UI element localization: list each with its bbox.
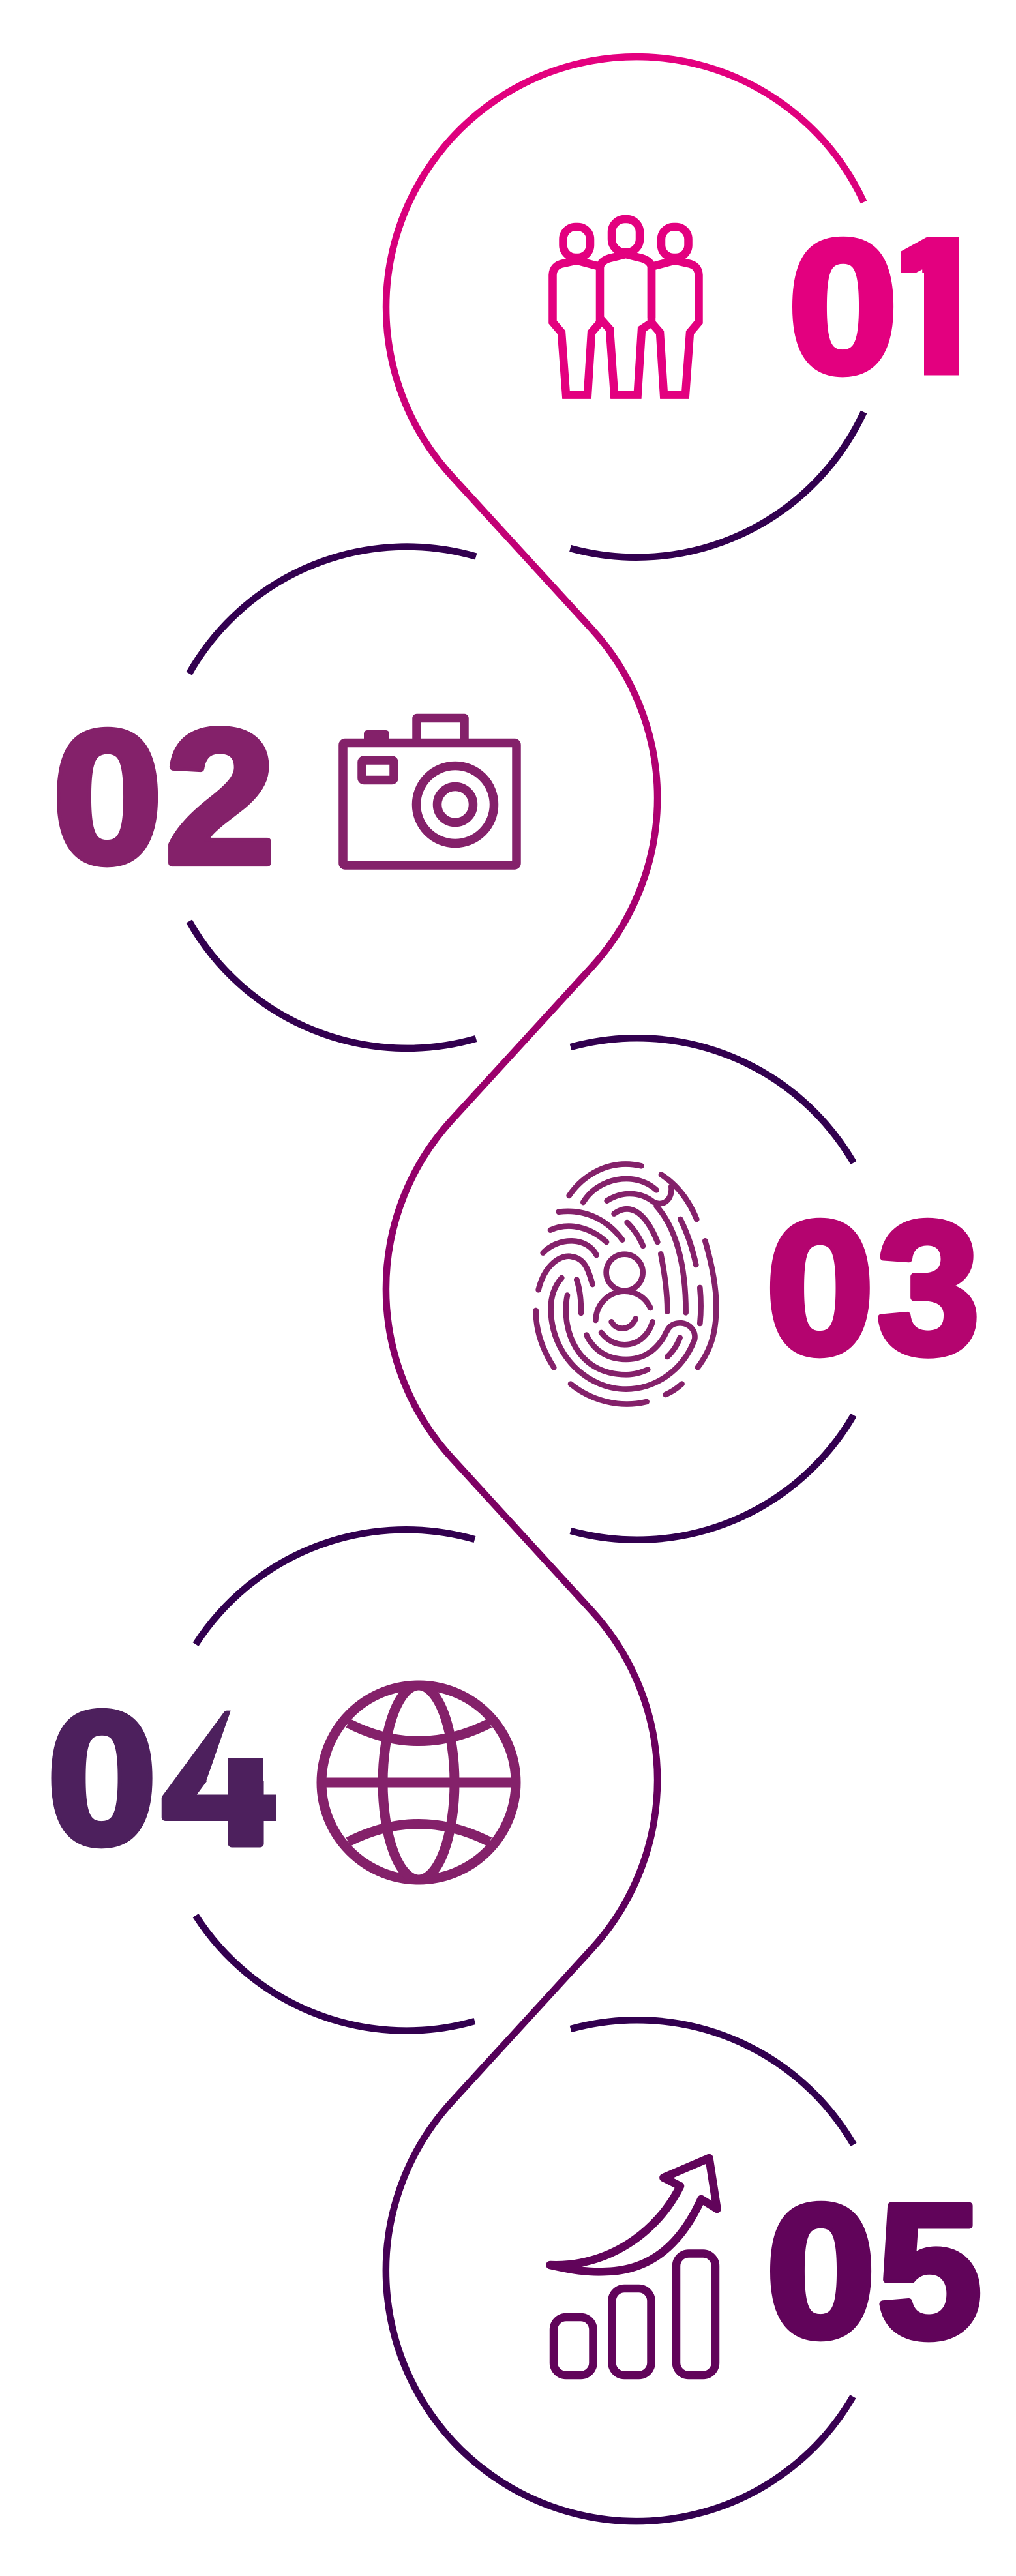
number 01	[792, 236, 959, 377]
number 05	[766, 2165, 982, 2377]
number 05: 0	[766, 2165, 876, 2376]
icon: growth bars and arrow	[550, 2158, 717, 2375]
icon: fingerprint with person	[536, 1164, 716, 1404]
arc: step 03 upper	[571, 1038, 854, 1163]
step 05	[550, 2020, 982, 2377]
arc: step 03 lower	[571, 1415, 854, 1540]
number 02	[53, 690, 275, 904]
number 04: 0	[47, 1672, 157, 1884]
arc: step 04 upper	[196, 1530, 475, 1644]
step 01	[548, 215, 959, 561]
step 02	[53, 547, 516, 1048]
number 01: 0	[788, 201, 898, 412]
number 02: 2	[165, 690, 275, 904]
number 01: 1	[874, 200, 999, 412]
number 04: 4	[162, 1674, 282, 1884]
number 03: 3	[877, 1182, 980, 1393]
arc: step 05 upper	[571, 2020, 854, 2145]
icon: globe	[321, 1685, 516, 1880]
icon: three people	[553, 219, 699, 395]
arc: step 04 lower	[196, 1916, 475, 2031]
step 04	[47, 1530, 516, 2031]
number 04	[51, 1708, 276, 1849]
icon: camera	[343, 718, 516, 865]
main winding line through all five steps	[386, 57, 864, 2521]
number 03	[766, 1182, 980, 1393]
arc: step 02 upper	[189, 547, 476, 674]
arc: step 01 lower	[570, 412, 864, 557]
number 02: 0	[53, 691, 162, 902]
number 05: 5	[877, 2165, 982, 2377]
arc: step 02 lower	[189, 921, 476, 1048]
step 03	[536, 1038, 980, 1540]
number 03: 0	[766, 1183, 874, 1393]
